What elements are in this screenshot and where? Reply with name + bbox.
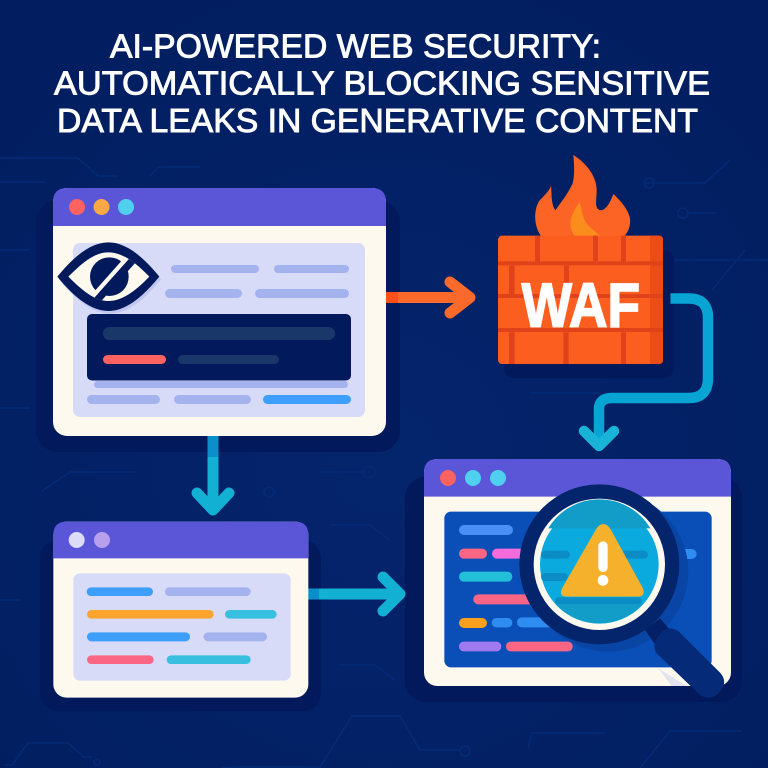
arrow: source window to WAF bbox=[386, 282, 470, 313]
panel: output browser window bbox=[53, 522, 308, 698]
content lines bbox=[87, 587, 277, 664]
title: AI-POWERED WEB SECURITY: bbox=[110, 28, 601, 64]
WAF label: WAF bbox=[522, 271, 640, 340]
panel: inspected browser window bbox=[424, 459, 731, 698]
window controls bbox=[69, 532, 110, 548]
code panel bbox=[444, 512, 712, 667]
window controls bbox=[440, 470, 506, 486]
window controls bbox=[69, 199, 134, 215]
highlighted line bbox=[263, 395, 351, 404]
icon: brick wall bbox=[498, 236, 663, 364]
dark sensitive data panel bbox=[87, 314, 351, 380]
panel: source browser window bbox=[53, 188, 386, 436]
title: DATA LEAKS IN GENERATIVE CONTENT bbox=[57, 102, 698, 139]
icon: magnifying glass with warning bbox=[519, 484, 724, 698]
icon: flame bbox=[535, 155, 630, 237]
arrow: source window to output window bbox=[197, 436, 229, 510]
content placeholder lines bbox=[87, 265, 349, 404]
panel: WAF firewall bbox=[498, 155, 663, 364]
title bbox=[54, 28, 710, 139]
icon: crossed eye bbox=[57, 242, 161, 314]
title: AUTOMATICALLY BLOCKING SENSITIVE bbox=[54, 64, 710, 102]
arrow: WAF to inspected window bbox=[584, 298, 708, 446]
arrow: output window to inspected window bbox=[308, 577, 400, 611]
